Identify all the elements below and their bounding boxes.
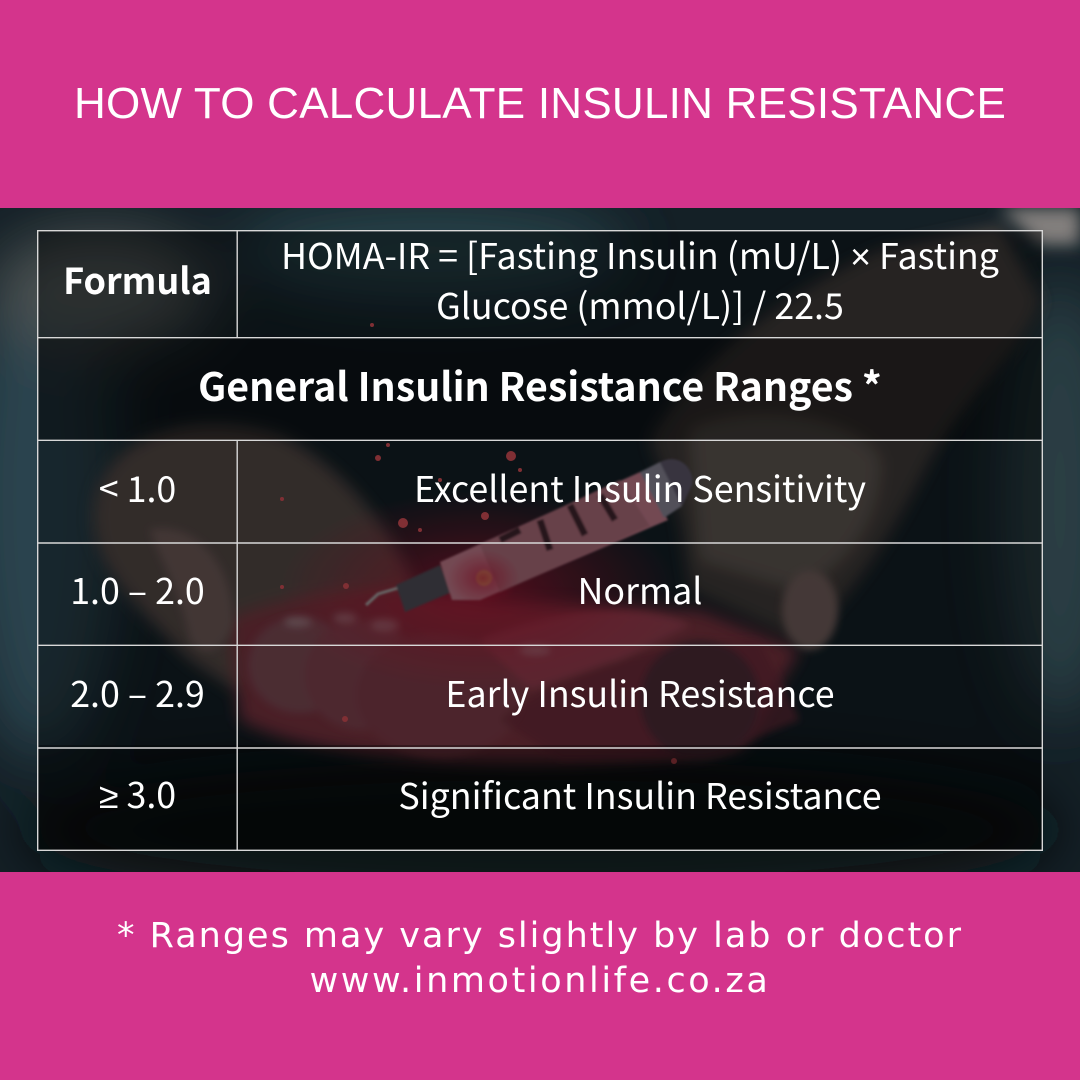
formula text: Glucose (mmol/L)] / 22.5 xyxy=(436,278,844,330)
glow xyxy=(280,490,680,690)
background photo: hands holding insulin pen xyxy=(0,208,1080,872)
left hand xyxy=(94,425,420,700)
fingers xyxy=(248,617,352,713)
footer note xyxy=(117,916,963,1001)
formula text xyxy=(281,228,999,330)
right hand xyxy=(650,225,1040,640)
footer note: * Ranges may vary slightly by lab or doctor xyxy=(117,916,963,956)
row 3 range: 2.0 – 2.9 xyxy=(70,666,205,718)
top right finger xyxy=(1000,208,1080,245)
formula text: HOMA-IR = [Fasting Insulin (mU/L) × Fasting xyxy=(281,228,999,280)
row 2 range: 1.0 – 2.0 xyxy=(70,563,205,615)
row 4 meaning: Significant Insulin Resistance xyxy=(398,768,882,820)
table grid xyxy=(37,230,1043,851)
formula label: Formula xyxy=(63,253,212,305)
table: insulin resistance ranges xyxy=(37,228,1043,851)
row 2 meaning: Normal xyxy=(578,563,702,615)
finger highlights xyxy=(284,613,551,655)
sparks xyxy=(280,323,677,764)
palm xyxy=(230,590,800,762)
insulin pen xyxy=(366,459,692,612)
row 3 meaning: Early Insulin Resistance xyxy=(445,666,835,718)
row 1 range: < 1.0 xyxy=(99,461,176,513)
thumb xyxy=(150,528,233,651)
row 1 meaning: Excellent Insulin Sensitivity xyxy=(414,461,866,513)
footer note: www.inmotionlife.co.za xyxy=(310,961,770,1001)
title: HOW TO CALCULATE INSULIN RESISTANCE xyxy=(74,79,1006,128)
table shading xyxy=(38,231,1042,850)
ranges heading: General Insulin Resistance Ranges * xyxy=(198,356,882,413)
row 4 range: ≥ 3.0 xyxy=(99,766,176,818)
